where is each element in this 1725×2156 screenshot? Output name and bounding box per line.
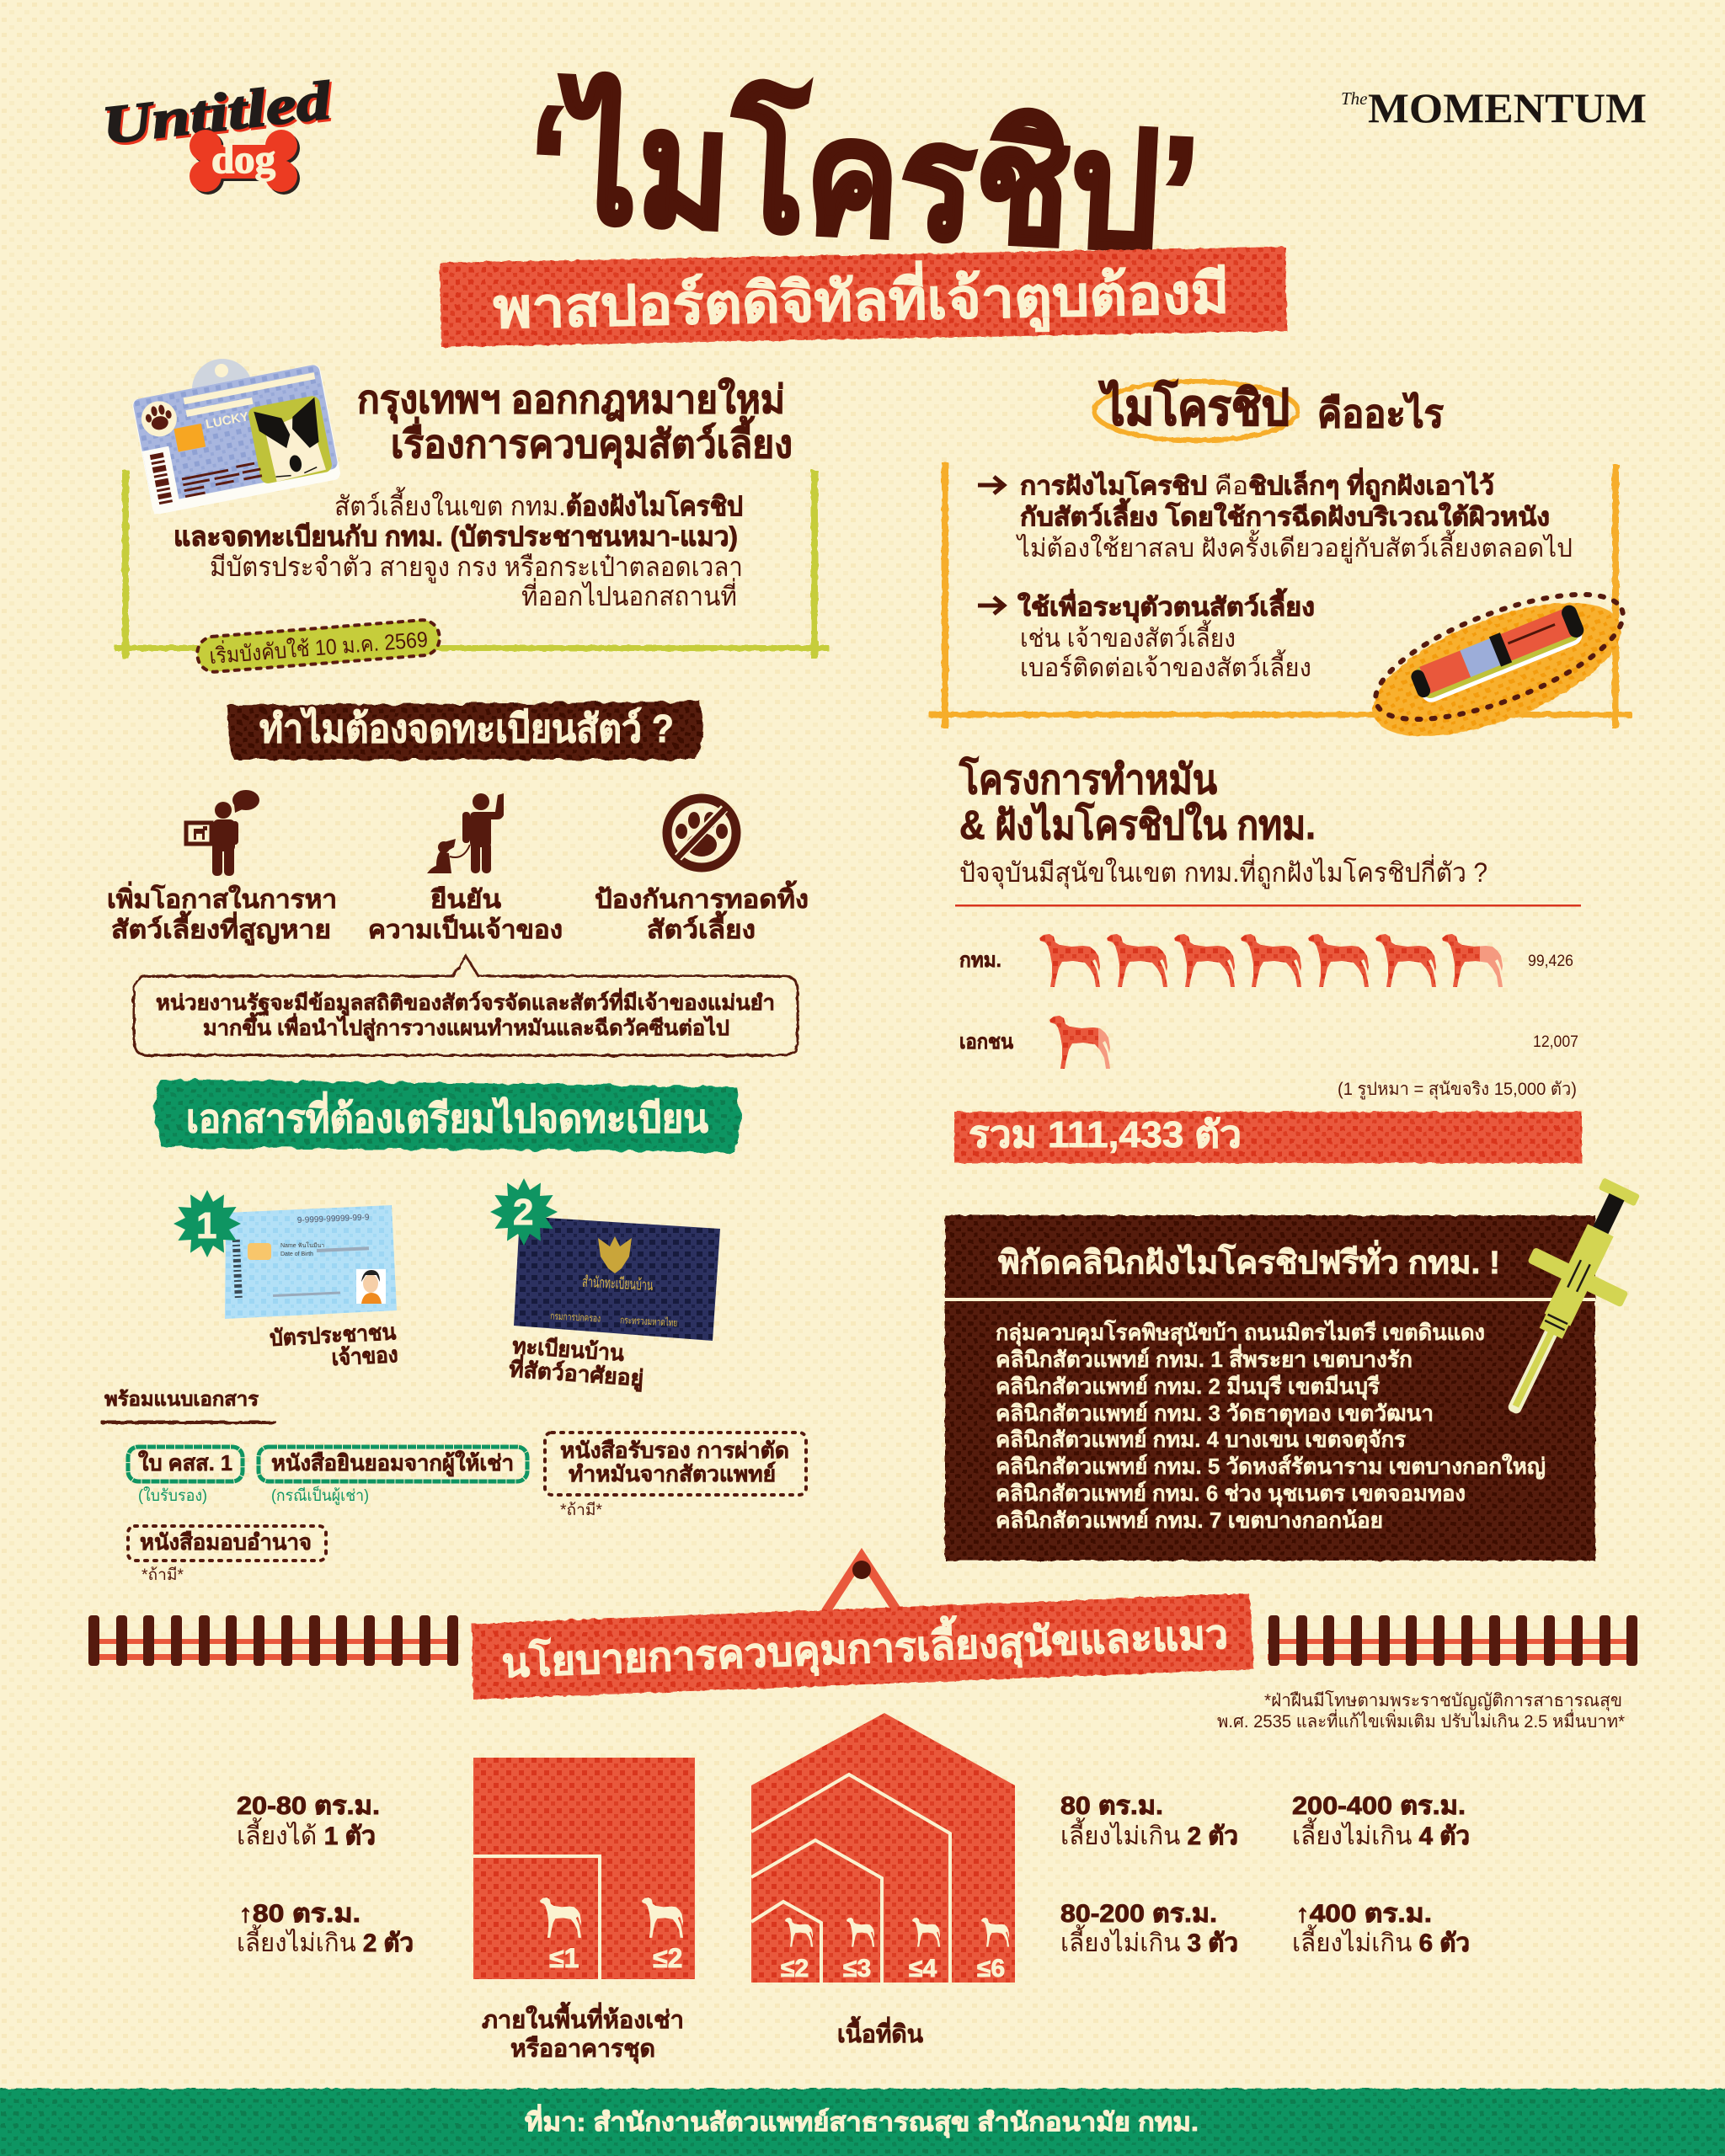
- text: land rule over 400 sqm: เลี้ยงไม่เกิน 6 ตัว: [1292, 1924, 1470, 1957]
- logo: Untitled dog: dog: [211, 137, 275, 182]
- text: condo rule over 80 sqm: [237, 1900, 414, 1957]
- icon: house registration book: กรมการปกครอง: [550, 1310, 601, 1325]
- icon: pet ID card: LUCKY: [205, 409, 250, 432]
- icon: badge number 2: 2: [513, 1192, 533, 1233]
- text: definition: กับสัตว์เลี้ยง โดยใช้การฉีดฝังบริเวณใต้ผิวหนัง: [1020, 498, 1550, 531]
- caption: citizen ID: บัตรประชาชน: [270, 1319, 397, 1351]
- heading: law: [357, 376, 793, 468]
- note: penalty: พ.ศ. 2535 และที่แก้ไขเพิ่มเติม ปรับไม่เกิน 2.5 หมื่นบาท*: [1217, 1709, 1625, 1732]
- text: reason 3: [595, 880, 809, 944]
- clinic list: คลินิกสัตวแพทย์ กทม. 7 เขตบางกอกน้อย: [996, 1508, 1383, 1533]
- attachment: power of attorney: *ถ้ามี*: [142, 1566, 184, 1584]
- text: land rule 80-200 sqm: [1060, 1900, 1238, 1957]
- caption: house registration: ที่สัตว์อาศัยอยู่: [508, 1353, 644, 1393]
- logo: The Momentum: MOMENTUM: [1368, 84, 1647, 131]
- logo: Untitled dog: Untitled: [99, 70, 334, 155]
- icon: house registration book: กระทรวงมหาดไทย: [620, 1314, 678, 1329]
- text: condo rule 20-80 sqm: 20-80 ตร.ม.: [237, 1792, 380, 1820]
- clinic list: กลุ่มควบคุมโรคพิษสุนัขบ้า ถนนมิตรไมตรี เขตดินแดง: [996, 1319, 1485, 1347]
- logo: Untitled dog: [99, 70, 336, 195]
- text: condo rule over 80 sqm: ↑80 ตร.ม.: [238, 1900, 360, 1928]
- attachment: landlord consent: (กรณีเป็นผู้เช่า): [271, 1485, 369, 1505]
- icons: dogs and limits: ≤3: [843, 1955, 871, 1983]
- text: land rule 80-200 sqm: เลี้ยงไม่เกิน 3 ตัว: [1060, 1924, 1238, 1957]
- heading: law: เรื่องการควบคุมสัตว์เลี้ยง: [391, 415, 793, 468]
- text: condo rule over 80 sqm: เลี้ยงไม่เกิน 2 ตัว: [237, 1924, 414, 1957]
- attachment: form 1: [128, 1447, 243, 1505]
- badge: effective date: เริ่มบังคับใช้ 10 ม.ค. 2569: [208, 624, 429, 669]
- text: land rule over 400 sqm: [1292, 1900, 1470, 1957]
- text block: law detail: [174, 487, 743, 611]
- total bar: [954, 1112, 1582, 1163]
- row: private clinic dogs: 12,007: [1533, 1033, 1578, 1051]
- frame lines: [929, 462, 1632, 728]
- attachment: sterilisation certificate: *ถ้ามี*: [560, 1501, 603, 1519]
- text: reason 2: [368, 886, 563, 944]
- text: condo rule 20-80 sqm: [237, 1792, 380, 1850]
- icon: badge number 1: [174, 1190, 241, 1257]
- panel: new Bangkok law: [115, 359, 829, 673]
- clinic list: คลินิกสัตวแพทย์ กทม. 3 วัดธาตุทอง เขตวัฒนา: [996, 1401, 1434, 1428]
- text: purpose: เช่น เจ้าของสัตว์เลี้ยง: [1020, 620, 1236, 653]
- icon: person with dog on leash: [427, 793, 504, 873]
- icon: syringe: [1466, 1164, 1669, 1435]
- frame lines: [115, 470, 829, 659]
- text: definition: ไม่ต้องใช้ยาสลบ ฝังครั้งเดียวอยู่กับสัตว์เลี้ยงตลอดไป: [1016, 530, 1573, 563]
- icons: dogs and limits: ≤6: [977, 1955, 1005, 1983]
- text: definition: การฝังไมโครชิป คือชิปเล็กๆ ที่ถูกฝังเอาไว้: [1020, 467, 1494, 502]
- footer: source: ที่มา: สำนักงานสัตวแพทย์สาธารณสุข สำนักอนามัย กทม.: [525, 2104, 1199, 2138]
- text: condo rule 20-80 sqm: เลี้ยงได้ 1 ตัว: [237, 1817, 376, 1850]
- chart: apartment floor area: [473, 1758, 695, 1979]
- attachment: landlord consent: [259, 1447, 527, 1505]
- caption: citizen ID: [270, 1319, 398, 1374]
- chart: land area house: [751, 1713, 1015, 1983]
- text: reason 1: เพิ่มโอกาสในการหา: [107, 881, 337, 914]
- note: penalty: *ฝ่าฝืนมีโทษตามพระราชบัญญัติการสาธารณสุข: [1264, 1690, 1622, 1711]
- attachment: form 1: ใบ คสส. 1: [138, 1450, 232, 1476]
- icons: dogs and limits: ≤2: [781, 1955, 809, 1983]
- logo: The Momentum: The: [1341, 88, 1368, 109]
- attachment: sterilisation certificate: [545, 1433, 806, 1519]
- icon: dog limit 2: ≤2: [653, 1943, 682, 1973]
- note: penalty: [1217, 1690, 1625, 1732]
- icon: badge number 1: 1: [196, 1205, 216, 1246]
- caption: land: เนื้อที่ดิน: [837, 2015, 923, 2048]
- icons: dogs and limits: [781, 1918, 1009, 1983]
- clinic list: คลินิกสัตวแพทย์ กทม. 1 สี่พระยา เขตบางรัก: [996, 1343, 1413, 1372]
- text: reason 2: ยืนยัน: [430, 886, 502, 914]
- icon: house registration book: สำนักทะเบียนบ้าน: [582, 1273, 654, 1294]
- document 1: ID card: [174, 1190, 398, 1374]
- text: land rule 80 sqm: 80 ตร.ม.: [1060, 1792, 1163, 1820]
- icon: house registration book: [514, 1216, 720, 1341]
- icon: citizen ID card: 9-9999-99999-99-9: [297, 1213, 370, 1225]
- attachment: form 1: (ใบรับรอง): [138, 1486, 207, 1505]
- caption: apartment: หรืออาคารชุด: [510, 2036, 655, 2063]
- heading band: documents: [153, 1080, 741, 1152]
- clinic list: คลินิกสัตวแพทย์ กทม. 4 บางเขน เขตจตุจักร: [996, 1427, 1406, 1454]
- banner: policy heading: นโยบายการควบคุมการเลี้ยงสุนัขและแมว: [500, 1604, 1229, 1689]
- row: BMA dogs: [959, 934, 1573, 987]
- callout: government data: มากขึ้น เพื่อนำไปสู่การวางแผนทำหมันและฉีดวัคซีนต่อไป: [203, 1011, 729, 1042]
- icon: pet ID card: [131, 359, 341, 515]
- text: land rule 200-400 sqm: [1292, 1792, 1470, 1850]
- text: reason 1: สัตว์เลี้ยงที่สูญหาย: [111, 910, 331, 946]
- icons: dogs and limits: ≤4: [909, 1955, 937, 1983]
- text: land rule 200-400 sqm: 200-400 ตร.ม.: [1292, 1792, 1466, 1820]
- clinic list: คลินิกสัตวแพทย์ กทม. 6 ช่วง นุชเนตร เขตจอมทอง: [996, 1481, 1466, 1508]
- icon: citizen ID card: Name ฟันโนมีนา: [280, 1241, 324, 1249]
- icon: no pet abandonment: [667, 798, 736, 867]
- icon: dog limit 1: [540, 1897, 581, 1973]
- text: purpose: [1017, 588, 1315, 682]
- heading band: why register: ทำไมต้องจดทะเบียนสัตว์ ?: [259, 707, 674, 750]
- icon: citizen ID card: Date of Birth: [280, 1251, 313, 1257]
- icon: microchip capsule: [1356, 569, 1637, 764]
- heading: what is microchip: [1094, 378, 1444, 440]
- heading: attachments: พร้อมแนบเอกสาร: [104, 1388, 259, 1410]
- caption: house registration: [508, 1332, 646, 1393]
- icon: arrow 2: [978, 597, 1004, 614]
- text block: law detail: มีบัตรประจำตัว สายจูง กรง หรือกระเป๋าตลอดเวลา: [210, 552, 743, 584]
- text block: law detail: และจดทะเบียนกับ กทม. (บัตรประชาชนหมา-แมว): [174, 521, 738, 552]
- caption: house registration: ทะเบียนบ้าน: [511, 1333, 625, 1366]
- icon: badge number 2: [490, 1178, 558, 1246]
- title: ‘ไมโครชิป’: [524, 68, 1203, 285]
- fence: right: [1268, 1615, 1637, 1666]
- clinic list: คลินิกสัตวแพทย์ กทม. 2 มีนบุรี เขตมีนบุรี: [996, 1374, 1380, 1401]
- text: purpose: ใช้เพื่อระบุตัวตนสัตว์เลี้ยง: [1017, 588, 1315, 623]
- text: reason 2: ความเป็นเจ้าของ: [368, 914, 563, 944]
- text: reason 3: สัตว์เลี้ยง: [647, 910, 756, 944]
- panel: free clinics: [945, 1215, 1595, 1561]
- text: purpose: เบอร์ติดต่อเจ้าของสัตว์เลี้ยง: [1020, 649, 1311, 682]
- text: land rule 80-200 sqm: 80-200 ตร.ม.: [1060, 1900, 1217, 1928]
- panel: microchip definition: [929, 462, 1637, 764]
- heading: law: กรุงเทพฯ ออกกฎหมายใหม่: [357, 376, 785, 424]
- heading: what is microchip: คืออะไร: [1317, 392, 1444, 435]
- clinic list: [996, 1319, 1546, 1533]
- total bar: รวม 111,433 ตัว: [969, 1114, 1242, 1155]
- caption: citizen ID: เจ้าของ: [331, 1342, 398, 1370]
- text: land rule 200-400 sqm: เลี้ยงไม่เกิน 4 ตัว: [1292, 1817, 1470, 1850]
- logo: Untitled dog: Untitled: [101, 72, 336, 157]
- banner hanger: [825, 1556, 898, 1612]
- text block: law detail: สัตว์เลี้ยงในเขต กทม.ต้องฝังไมโครชิป: [334, 487, 743, 521]
- icon: citizen ID card: [225, 1205, 397, 1319]
- footer: source: [0, 2089, 1725, 2156]
- icon: dog limit 1: ≤1: [549, 1943, 579, 1973]
- heading: sterilisation and microchip project: & ฝังไมโครชิปใน กทม.: [959, 801, 1316, 848]
- text: land rule 80 sqm: [1060, 1792, 1238, 1850]
- banner: policy heading: [472, 1593, 1254, 1700]
- text: land rule over 400 sqm: ↑400 ตร.ม.: [1295, 1900, 1432, 1928]
- attachment: sterilisation certificate: หนังสือรับรอง การผ่าตัด: [560, 1438, 789, 1463]
- heading: sterilisation and microchip project: โครงการทำหมัน: [959, 755, 1217, 803]
- subtitle banner: พาสปอร์ตดิจิทัลที่เจ้าตูบต้องมี: [493, 253, 1230, 344]
- text block: law detail: ที่ออกไปนอกสถานที่: [521, 578, 737, 611]
- attachment: power of attorney: หนังสือมอบอำนาจ: [140, 1529, 312, 1555]
- text: definition: [1016, 467, 1573, 563]
- document 2: house registration: [490, 1178, 720, 1393]
- heading: clinics: พิกัดคลินิกฝังไมโครชิปฟรีทั่ว กทม. !: [998, 1240, 1500, 1281]
- fence: left: [88, 1615, 458, 1666]
- pictogram chart: microchipped dogs: [959, 934, 1578, 1100]
- row: private clinic dogs: เอกชน: [959, 1031, 1014, 1054]
- attachment: landlord consent: หนังสือยินยอมจากผู้ให้เช่า: [271, 1450, 514, 1477]
- callout: government data: [134, 956, 798, 1055]
- legend: (1 รูปหมา = สุนัขจริง 15,000 ตัว): [1338, 1080, 1577, 1100]
- callout: government data: หน่วยงานรัฐจะมีข้อมูลสถิติของสัตว์จรจัดและสัตว์ที่มีเจ้าของแม่นยำ: [156, 988, 775, 1017]
- text: reason 1: [107, 881, 337, 946]
- heading: attachments: [101, 1388, 276, 1424]
- clinic list: คลินิกสัตวแพทย์ กทม. 5 วัดหงส์รัตนาราม เขตบางกอกใหญ่: [996, 1454, 1546, 1480]
- heading band: documents: เอกสารที่ต้องเตรียมไปจดทะเบียน: [186, 1091, 709, 1140]
- caption: apartment: [482, 2001, 684, 2063]
- icon: person holding missing pet poster: [186, 790, 259, 876]
- subtitle banner: [440, 247, 1287, 347]
- icon: arrow 1: [978, 477, 1004, 494]
- text: reason 3: ป้องกันการทอดทิ้ง: [595, 880, 809, 914]
- icon: dog limit 2: [642, 1897, 683, 1973]
- caption: apartment: ภายในพื้นที่ห้องเช่า: [482, 2001, 684, 2034]
- row: BMA dogs: กทม.: [959, 949, 1001, 972]
- attachment: power of attorney: [128, 1526, 326, 1584]
- attachment: sterilisation certificate: ทำหมันจากสัตวแพทย์: [569, 1461, 776, 1486]
- heading: what is microchip: ไมโครชิป: [1098, 378, 1290, 435]
- heading: sterilisation and microchip project: [959, 755, 1316, 848]
- row: private clinic dogs: [959, 1016, 1578, 1069]
- row: BMA dogs: 99,426: [1528, 953, 1573, 970]
- text: land rule 80 sqm: เลี้ยงไม่เกิน 2 ตัว: [1060, 1817, 1238, 1850]
- text: question: ปัจจุบันมีสุนัขในเขต กทม.ที่ถูกฝังไมโครชิปกี่ตัว ?: [959, 854, 1487, 889]
